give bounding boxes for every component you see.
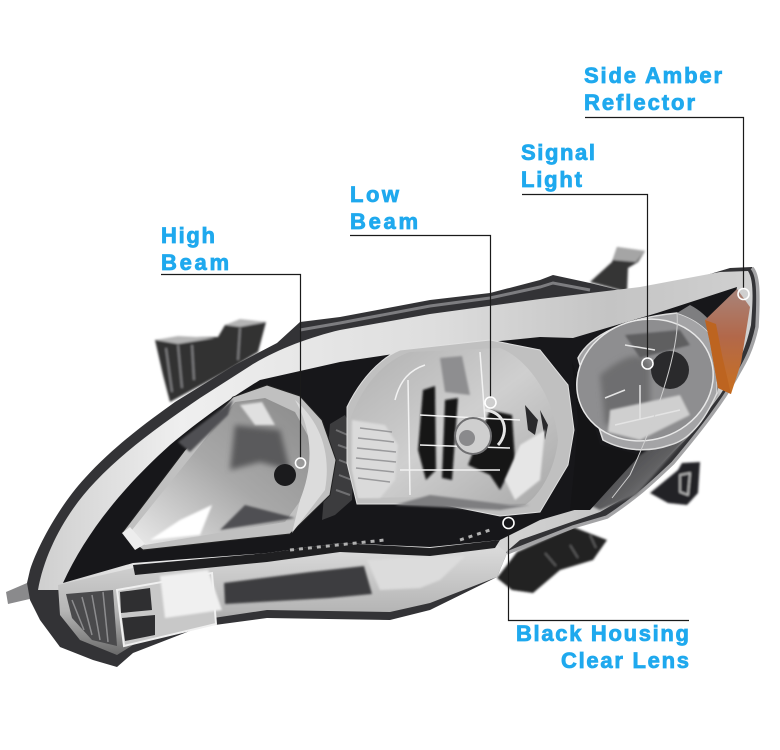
high beam bulb <box>274 464 296 486</box>
marker: high beam <box>296 458 306 468</box>
high beam neck <box>322 415 355 520</box>
callout: black housing clear lens <box>503 518 689 673</box>
turn signal box <box>117 570 222 646</box>
low beam lens <box>350 348 558 510</box>
chrome gradient below signal <box>590 392 720 510</box>
left tip flange <box>6 583 34 604</box>
marker: side amber reflector <box>738 288 749 300</box>
high beam chrome rim <box>122 385 336 550</box>
lens seam line <box>612 313 677 498</box>
label: black housing: Black Housing <box>516 621 689 646</box>
label: signal light line 2: Light <box>521 167 583 192</box>
right rear connector <box>650 462 700 505</box>
amber side reflector <box>705 289 750 394</box>
label: low beam: Low <box>350 182 400 207</box>
marker: low beam <box>485 397 496 408</box>
callout: high beam <box>161 223 306 468</box>
leader line: high beam <box>161 274 300 458</box>
black inner housing <box>63 287 737 583</box>
lower white reflector <box>367 556 465 590</box>
dark gap beside signal <box>570 362 640 510</box>
label: clear lens: Clear Lens <box>561 648 689 673</box>
lower grey lens strip <box>58 545 507 655</box>
outer housing silhouette <box>27 267 758 667</box>
rear left mounting bracket <box>155 319 267 402</box>
leader line: side amber reflector <box>585 118 744 288</box>
headlight assembly <box>6 247 758 667</box>
lower fan reflector <box>66 590 117 646</box>
signal light lens <box>561 302 729 458</box>
bottom wiring connector <box>497 527 607 593</box>
callout: low beam <box>350 182 496 408</box>
low beam chrome rim <box>347 340 574 516</box>
leader line: signal light <box>522 194 648 358</box>
label: reflector: Reflector <box>584 90 695 115</box>
lower dark ribbing <box>224 566 372 604</box>
marker: signal light <box>642 358 653 369</box>
right lens edge <box>507 268 758 553</box>
callout: side amber reflector <box>584 63 749 300</box>
leader line: black housing <box>508 529 689 620</box>
signal light rim <box>578 313 718 450</box>
label: high beam: High <box>161 223 215 248</box>
marker: black housing <box>503 518 514 528</box>
low beam bulb <box>455 410 504 454</box>
label: high beam line 2: Beam <box>161 250 229 275</box>
callout: signal light <box>521 140 653 369</box>
DOT marking strip <box>133 530 500 575</box>
leader line: low beam <box>350 236 490 397</box>
clear lens chrome band <box>38 271 753 590</box>
high beam lens <box>122 398 327 550</box>
top rear bracket <box>590 247 645 292</box>
signal light bulb <box>651 351 689 389</box>
label: signal light: Signal <box>521 140 595 165</box>
label: side amber: Side Amber <box>584 63 722 88</box>
grey gasket strip <box>300 283 590 330</box>
chrome wedge <box>677 305 725 393</box>
label: low beam line 2: Beam <box>350 209 418 234</box>
